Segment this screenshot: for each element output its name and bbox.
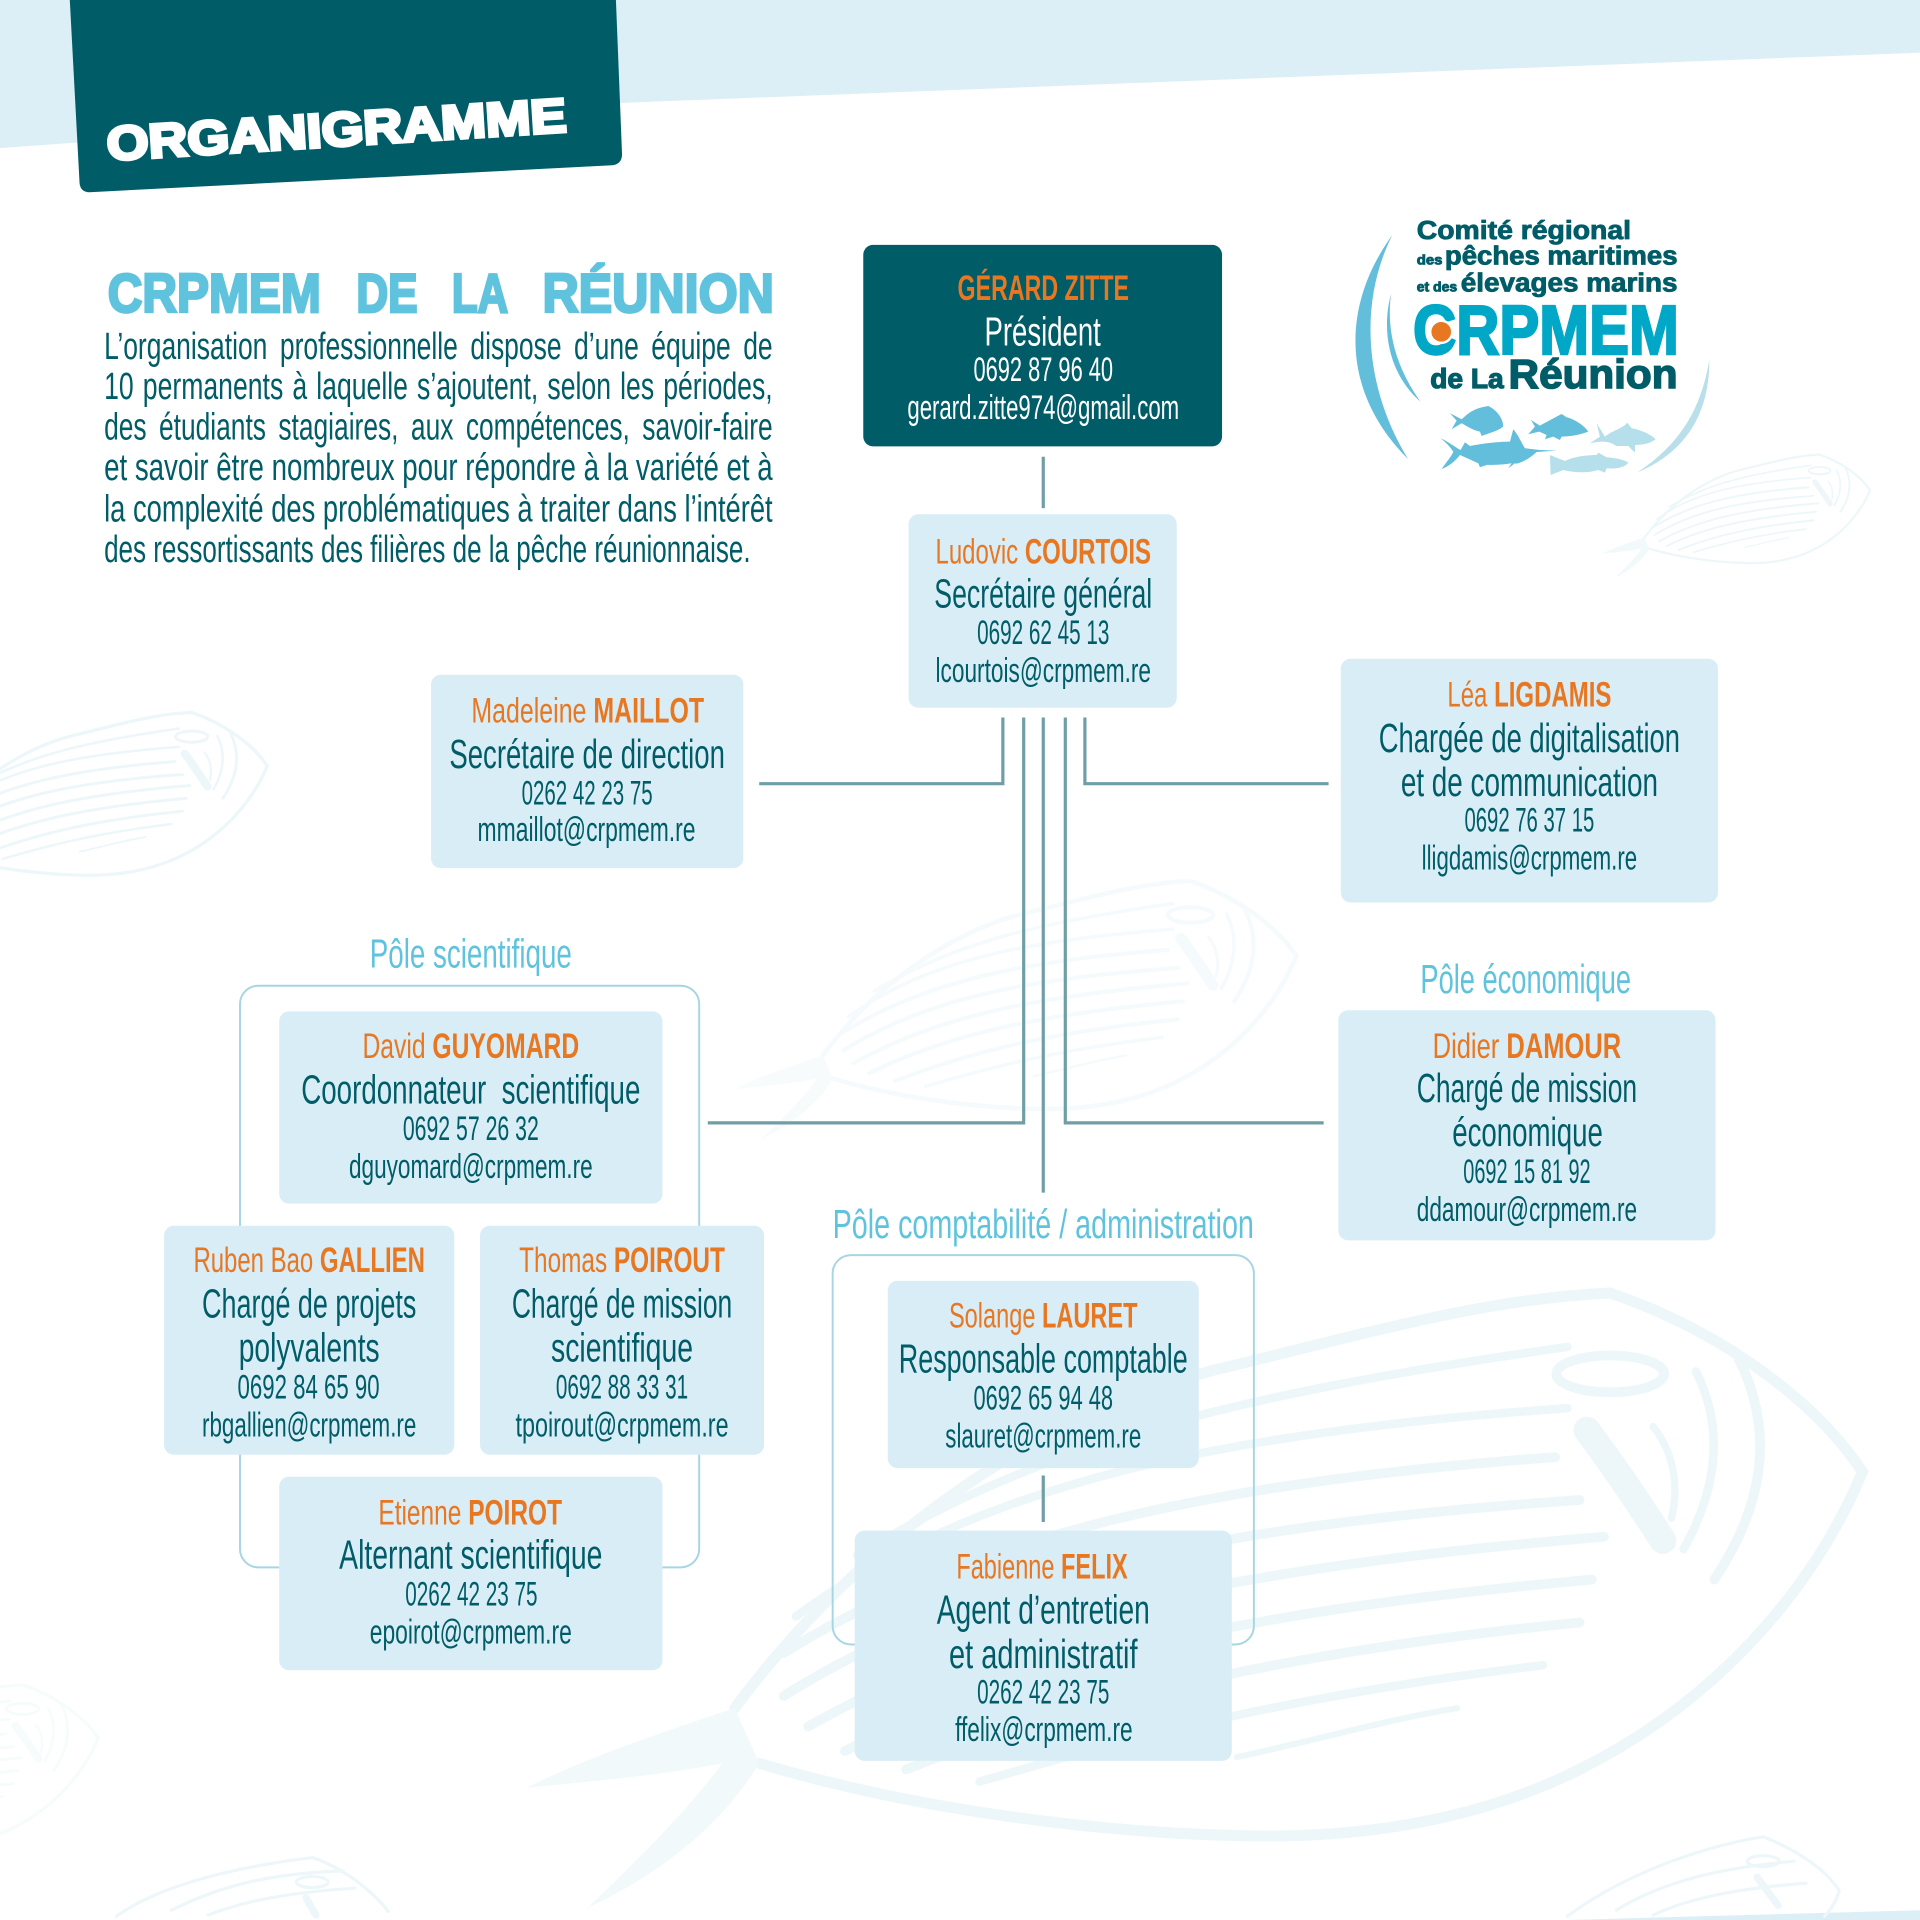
logo text: élevages marins (1461, 269, 1678, 297)
background fish: top right (1603, 455, 1870, 577)
background fish: bottom right (1567, 1837, 1839, 1916)
background fish: large (527, 1293, 1862, 1908)
card: Madeleine Maillot: Secrétaire de direction (449, 731, 725, 777)
card: Ruben Bao Gallien: polyvalents (239, 1325, 380, 1371)
connector: to pôle scientifique (708, 718, 1024, 1123)
card: Gérard Zitte (863, 245, 1222, 446)
card: Ruben Bao Gallien: Chargé de projets (202, 1281, 416, 1327)
intro paragraph: L’organisation professionnelle dispose d’une équipe de (104, 326, 773, 368)
card: Léa Ligdamis: et de communication (1401, 759, 1658, 805)
card: Madeleine Maillot: 0262 42 23 75 (522, 774, 653, 812)
connector: president to secretary general (1042, 457, 1045, 508)
card: Fabienne Felix: Agent d’entretien (937, 1587, 1150, 1633)
card: Fabienne Felix (855, 1531, 1232, 1761)
background fish: far left (0, 1685, 98, 1869)
logo text: pêches maritimes (1445, 242, 1678, 270)
card: Etienne Poirot: Alternant scientifique (339, 1532, 602, 1578)
card: Thomas Poirout: tpoirout@crpmem.re (516, 1406, 729, 1444)
card: Solange Lauret: Responsable comptable (899, 1336, 1188, 1382)
card: Gérard Zitte: gerard.zitte974@gmail.com (907, 389, 1179, 427)
card: Léa Ligdamis (1341, 659, 1718, 902)
card: Didier Damour: économique (1452, 1109, 1603, 1155)
background fish: left (0, 712, 267, 897)
logo text (1413, 217, 1679, 397)
card: Léa Ligdamis: 0692 76 37 15 (1464, 801, 1594, 839)
card: David Guyomard (279, 1011, 662, 1204)
card: David Guyomard: 0692 57 26 32 (403, 1110, 539, 1148)
label: Pôle économique: Pôle économique (1420, 956, 1631, 1002)
card: Etienne Poirot: Etienne POIROT (378, 1492, 562, 1532)
card: Etienne Poirot (279, 1477, 662, 1670)
logo fish (1441, 406, 1656, 475)
card: Ludovic Courtois (909, 514, 1177, 708)
card: Ruben Bao Gallien: 0692 84 65 90 (238, 1368, 380, 1406)
card: Fabienne Felix: Fabienne FELIX (956, 1546, 1128, 1586)
card: Solange Lauret (888, 1281, 1199, 1468)
intro paragraph: des ressortissants des filières de la pêche réunionnaise. (104, 529, 751, 571)
card: Ludovic Courtois: Ludovic COURTOIS (936, 531, 1151, 571)
card: Didier Damour: ddamour@crpmem.re (1417, 1191, 1637, 1229)
card: Ludovic Courtois: 0692 62 45 13 (977, 614, 1109, 652)
intro paragraph: et savoir être nombreux pour répondre à la variété et à (104, 447, 773, 489)
card: Ludovic Courtois: Secrétaire général (934, 570, 1152, 616)
connector: to pôle économique (1065, 718, 1324, 1123)
card: David Guyomard: Coordonnateur scientifique (301, 1066, 640, 1112)
logo text: des (1417, 252, 1442, 267)
card: Madeleine Maillot: mmaillot@crpmem.re (478, 811, 696, 849)
connector: Solange Lauret to Fabienne Felix (1042, 1476, 1045, 1522)
card: Gérard Zitte: GÉRARD ZITTE (958, 268, 1129, 308)
intro paragraph: 10 permanents à laquelle s’ajoutent, selon les périodes, (104, 366, 773, 408)
card: Fabienne Felix: 0262 42 23 75 (977, 1673, 1109, 1711)
background fish: middle (735, 881, 1297, 1139)
label: Pôle comptabilité / administration: Pôle comptabilité / administration (833, 1201, 1254, 1247)
card: Léa Ligdamis: lligdamis@crpmem.re (1422, 839, 1637, 877)
logo text: et des (1417, 279, 1457, 294)
card: Fabienne Felix: et administratif (949, 1631, 1138, 1677)
heading: CRPMEM de la Réunion: LA (452, 262, 508, 324)
title banner (70, 0, 622, 192)
connector: to pôle comptabilité (1042, 718, 1045, 1193)
card: Solange Lauret: slauret@crpmem.re (945, 1417, 1141, 1455)
logo arcs (1355, 235, 1709, 473)
card: Didier Damour: Chargé de mission (1417, 1065, 1637, 1111)
card: Solange Lauret: Solange LAURET (949, 1295, 1138, 1335)
heading: CRPMEM de la Réunion: DE (356, 262, 418, 324)
card: Thomas Poirout: 0692 88 33 31 (556, 1368, 688, 1406)
logo: CRPMEM de La Réunion (1355, 217, 1709, 475)
card: Ruben Bao Gallien: Ruben Bao GALLIEN (193, 1240, 425, 1280)
card: Solange Lauret: 0692 65 94 48 (973, 1379, 1113, 1417)
background fish: bottom left (116, 1858, 388, 1916)
intro paragraph: des étudiants stagiaires, aux compétences, savoir-faire (104, 407, 773, 449)
intro paragraph (104, 326, 773, 571)
intro paragraph: la complexité des problématiques à traiter dans l’intérêt (104, 489, 773, 531)
card: David Guyomard: dguyomard@crpmem.re (349, 1148, 593, 1186)
card: Ludovic Courtois: lcourtois@crpmem.re (936, 652, 1151, 690)
card: Etienne Poirot: epoirot@crpmem.re (370, 1613, 572, 1651)
card: Thomas Poirout: Chargé de mission (512, 1281, 732, 1327)
card: Fabienne Felix: ffelix@crpmem.re (955, 1711, 1133, 1749)
card: Thomas Poirout: Thomas POIROUT (519, 1240, 725, 1280)
logo orange dot (1430, 321, 1452, 343)
card: Thomas Poirout: scientifique (551, 1325, 693, 1371)
logo text: Réunion (1509, 351, 1678, 397)
connector: to Léa Ligdamis (1085, 718, 1329, 784)
heading: CRPMEM de la Réunion: CRPMEM (108, 262, 321, 324)
frame: Pôle comptabilité / administration (833, 1255, 1254, 1644)
card: Madeleine Maillot: Madeleine MAILLOT (471, 690, 704, 730)
title: ORGANIGRAMME (105, 90, 568, 171)
card: Madeleine Maillot (431, 675, 743, 868)
label: Pôle scientifique: Pôle scientifique (370, 930, 572, 976)
card: Gérard Zitte: Président (984, 308, 1101, 354)
card: Thomas Poirout (480, 1226, 764, 1455)
card: Ruben Bao Gallien: rbgallien@crpmem.re (202, 1406, 416, 1444)
card: Etienne Poirot: 0262 42 23 75 (405, 1575, 538, 1613)
logo text: de La (1430, 363, 1504, 394)
background band: bottom corner (1567, 1910, 1920, 1920)
logo text: Comité régional (1417, 217, 1631, 245)
connector: to Madeleine Maillot (759, 718, 1003, 784)
card: Didier Damour: Didier DAMOUR (1433, 1026, 1621, 1066)
background band: top (0, 0, 1920, 148)
heading: CRPMEM de la Réunion (108, 262, 774, 324)
card: Didier Damour (1338, 1010, 1716, 1240)
card: Didier Damour: 0692 15 81 92 (1463, 1153, 1591, 1191)
card: David Guyomard: David GUYOMARD (362, 1026, 579, 1066)
card: Ruben Bao Gallien (164, 1226, 454, 1455)
frame: Pôle scientifique (240, 986, 699, 1567)
card: Léa Ligdamis: Léa LIGDAMIS (1447, 675, 1611, 715)
card: Léa Ligdamis: Chargée de digitalisation (1379, 715, 1680, 761)
logo text: CRPMEM (1413, 291, 1679, 369)
heading: CRPMEM de la Réunion: RÉUNION (542, 262, 774, 324)
card: Gérard Zitte: 0692 87 96 40 (973, 351, 1113, 389)
